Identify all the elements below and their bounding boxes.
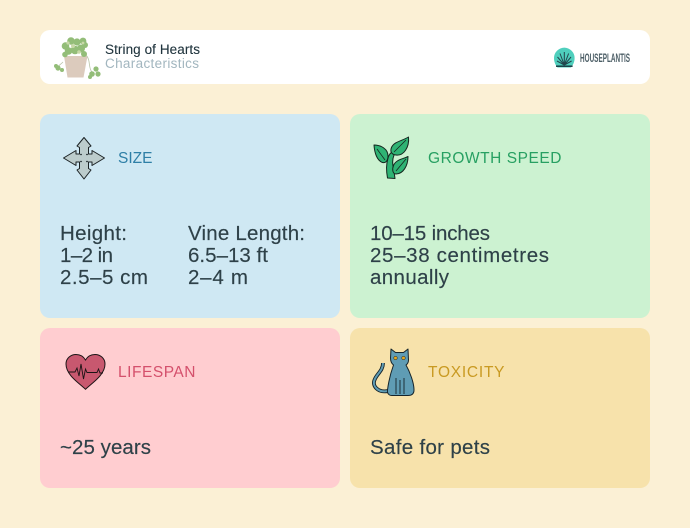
- vine length values: [188, 222, 305, 289]
- height values: 1–2 in: [60, 244, 113, 267]
- label: SIZE: [118, 150, 153, 167]
- height values: Height:: [60, 222, 127, 245]
- subtitle: Characteristics: [105, 56, 199, 71]
- label: GROWTH SPEED: [428, 150, 562, 167]
- growth values: 25–38 centimetres: [370, 244, 549, 267]
- header bar: [40, 30, 650, 84]
- label: TOXICITY: [428, 364, 505, 381]
- vine length values: 6.5–13 ft: [188, 244, 268, 267]
- logo: Houseplantis: [554, 48, 630, 68]
- label: LIFESPAN: [118, 364, 196, 381]
- panel: lifespan: [40, 328, 340, 488]
- logo: Houseplantis: HOUSEPLANTIS: [580, 51, 630, 65]
- growth values: [370, 222, 549, 289]
- panel: toxicity: [350, 328, 650, 488]
- icon: four-way arrows: [64, 138, 104, 179]
- icon: sitting cat: [374, 349, 414, 396]
- icon: potted plant: [54, 37, 101, 79]
- icon: heart with pulse: [66, 354, 105, 389]
- vine length values: 2–4 m: [188, 266, 248, 289]
- growth values: 10–15 inches: [370, 222, 490, 245]
- height values: 2.5–5 cm: [60, 266, 148, 289]
- vine length values: Vine Length:: [188, 222, 305, 245]
- height values: [60, 222, 148, 289]
- title: String of Hearts: [105, 42, 200, 57]
- icon: leafy sprout: [374, 137, 409, 178]
- lifespan value: ~25 years: [60, 436, 151, 459]
- panel: growth speed: [350, 114, 650, 318]
- toxicity value: Safe for pets: [370, 436, 490, 459]
- growth values: annually: [370, 266, 450, 289]
- panel: size: [40, 114, 340, 318]
